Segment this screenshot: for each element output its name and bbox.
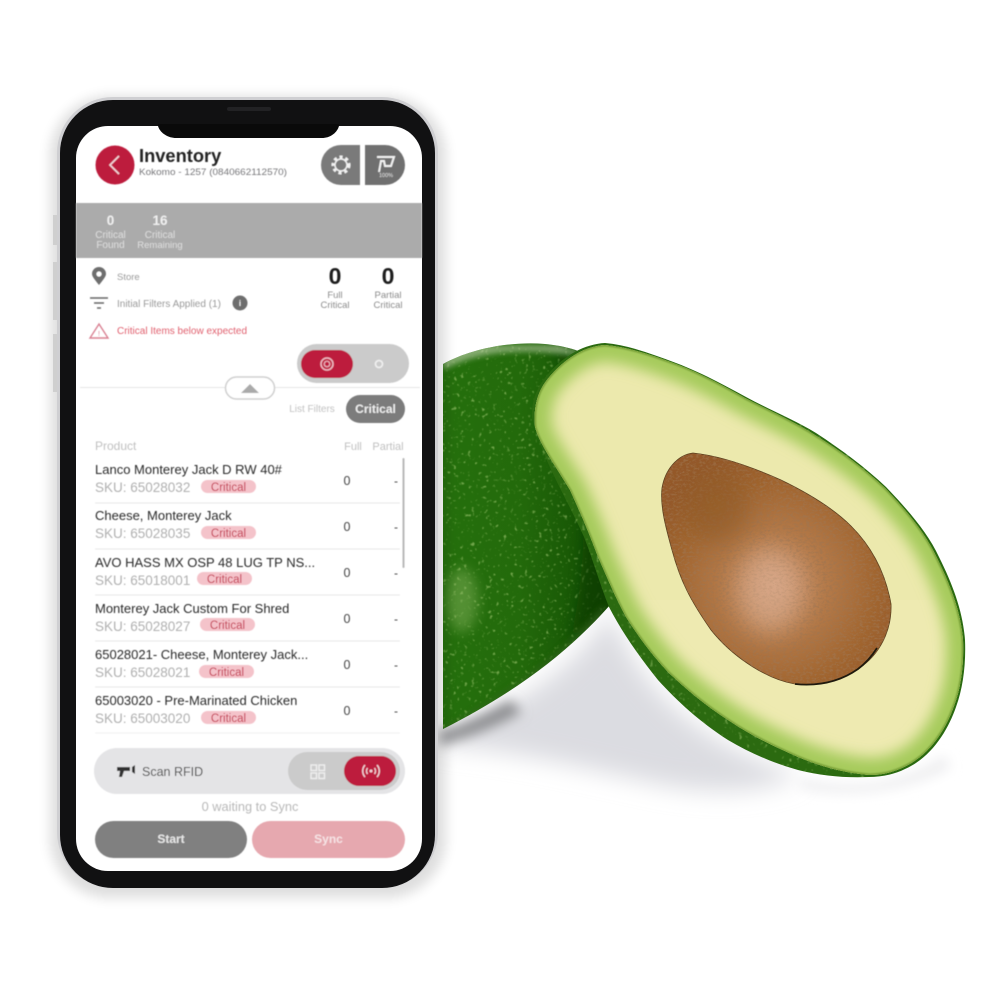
scan bar [94, 748, 405, 794]
icon: QR code [311, 765, 324, 778]
phone soft shadow [50, 96, 446, 898]
icon: RFID scanner [117, 765, 135, 777]
row 6: SKU: 65003020 [95, 711, 190, 726]
full critical count: Full [327, 290, 343, 301]
settings button [321, 145, 360, 185]
row 1: - [394, 474, 398, 488]
sync button [252, 821, 405, 858]
divider with collapse [80, 377, 420, 399]
avocado shadow [440, 610, 950, 793]
alert row [90, 324, 247, 338]
row 4: - [394, 612, 398, 626]
row 6: Critical [211, 713, 246, 725]
row 5: Critical [209, 667, 244, 679]
row 3 [95, 555, 400, 595]
screen [76, 126, 422, 871]
filters row: Initial Filters Applied (1) [117, 299, 221, 310]
row 2 [95, 508, 400, 549]
row 6: 65003020 - Pre-Marinated Chicken [95, 693, 297, 708]
device button [365, 145, 405, 185]
store row: Store [117, 272, 140, 283]
row 2: SKU: 65028035 [95, 526, 190, 541]
row 2: - [394, 520, 398, 534]
row 3: AVO HASS MX OSP 48 LUG TP NS... [95, 555, 315, 570]
device button: 100% [379, 173, 393, 179]
list filters: Critical [355, 402, 396, 416]
row 6: - [394, 704, 398, 718]
row 2: Critical [211, 528, 246, 540]
stats band: Critical [145, 230, 175, 241]
row 1: 0 [344, 474, 351, 488]
list filters: List Filters [289, 404, 335, 415]
row 4: SKU: 65028027 [95, 619, 190, 634]
row 2: 0 [344, 520, 351, 534]
row 5 [95, 647, 400, 687]
row 5: - [394, 658, 398, 672]
row 1: Lanco Monterey Jack D RW 40# [95, 462, 283, 477]
row 5: 65028021- Cheese, Monterey Jack... [95, 647, 308, 662]
partial critical count: 0 [382, 263, 394, 289]
alert row: Critical Items below expected [117, 326, 247, 337]
scan bar: Scan RFID [142, 765, 203, 779]
phone silver frame [57, 97, 438, 888]
start button: Start [157, 832, 185, 846]
table header: Partial [372, 441, 404, 453]
alert row: ! [98, 331, 100, 338]
avocado half [525, 340, 970, 785]
sync status: 0 waiting to Sync [202, 799, 299, 814]
avocado pit [655, 450, 895, 690]
row 5: 0 [344, 658, 351, 672]
row 4: Monterey Jack Custom For Shred [95, 601, 289, 616]
stats band: Remaining [137, 240, 183, 251]
phone body [60, 100, 435, 888]
phone [50, 96, 446, 898]
stats band [76, 203, 422, 258]
row 3: 0 [344, 566, 351, 580]
row 3: Critical [207, 574, 242, 586]
row 2: Cheese, Monterey Jack [95, 508, 232, 523]
side buttons [53, 215, 57, 245]
icon: RFID waves [363, 765, 379, 777]
stats band: 16 [152, 213, 168, 228]
row 4 [95, 601, 400, 641]
partial critical count: Partial [375, 290, 401, 301]
filters row [90, 296, 248, 310]
scrollbar [402, 458, 404, 568]
table header: Product [95, 439, 137, 453]
view toggle [297, 344, 409, 383]
stats band: Critical [95, 230, 126, 241]
row 1: SKU: 65028032 [95, 480, 190, 495]
sync button: Sync [314, 832, 343, 846]
app screen [76, 145, 422, 858]
header title: Inventory [139, 145, 222, 166]
stats band: 0 [107, 213, 114, 228]
row 3: - [394, 566, 398, 580]
whole avocado behind [443, 343, 609, 729]
row 4: 0 [344, 612, 351, 626]
store subtitle: Kokomo - 1257 (0840662112570) [139, 167, 287, 178]
filters row: i [239, 299, 241, 308]
table header: Full [344, 441, 362, 453]
notch [158, 124, 339, 138]
skin [532, 343, 965, 777]
full critical count: Critical [320, 300, 350, 311]
row 1 [95, 462, 400, 503]
row 4: Critical [210, 620, 245, 632]
header [96, 145, 405, 185]
partial critical count: Critical [373, 300, 403, 311]
full critical count: 0 [329, 263, 341, 289]
back button [96, 146, 134, 184]
row 5: SKU: 65028021 [95, 665, 190, 680]
table header [95, 439, 404, 453]
flesh [525, 340, 970, 785]
row 6: 0 [344, 704, 351, 718]
row 3: SKU: 65018001 [95, 573, 190, 588]
start button [95, 821, 247, 858]
row 1: Critical [211, 482, 246, 494]
list filters [289, 395, 405, 423]
stats band: Found [96, 240, 125, 251]
row 6 [95, 693, 400, 733]
full critical count [320, 263, 350, 311]
partial critical count [373, 263, 403, 311]
store row [92, 267, 140, 285]
